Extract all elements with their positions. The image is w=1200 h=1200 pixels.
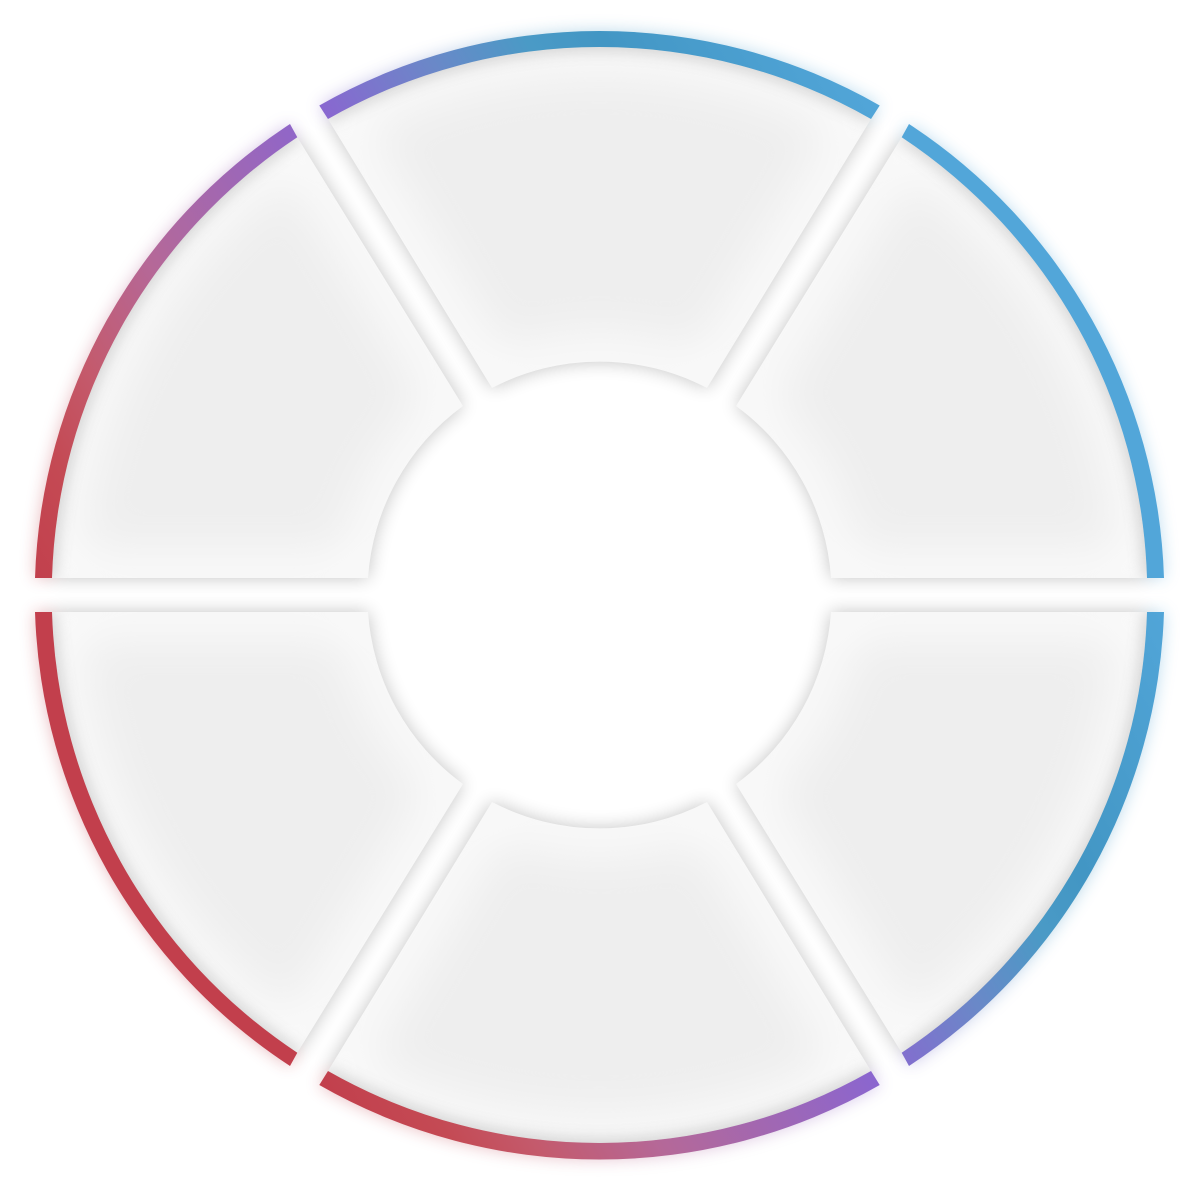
- rim: top segment: [319, 31, 880, 119]
- panel: lower right segment: [732, 603, 1172, 1068]
- panel: upper left segment: [27, 121, 467, 588]
- panel: lower left segment: [27, 603, 467, 1070]
- panel: upper right segment: [732, 120, 1172, 587]
- panel: top segment: [316, 22, 884, 392]
- panel: bottom segment: [316, 798, 883, 1168]
- rim: upper right segment: [902, 124, 1164, 578]
- rim: bottom segment: [319, 1071, 880, 1160]
- rim: lower left segment: [35, 612, 297, 1066]
- rim: lower right segment: [902, 612, 1164, 1066]
- rim: upper left segment: [35, 124, 297, 578]
